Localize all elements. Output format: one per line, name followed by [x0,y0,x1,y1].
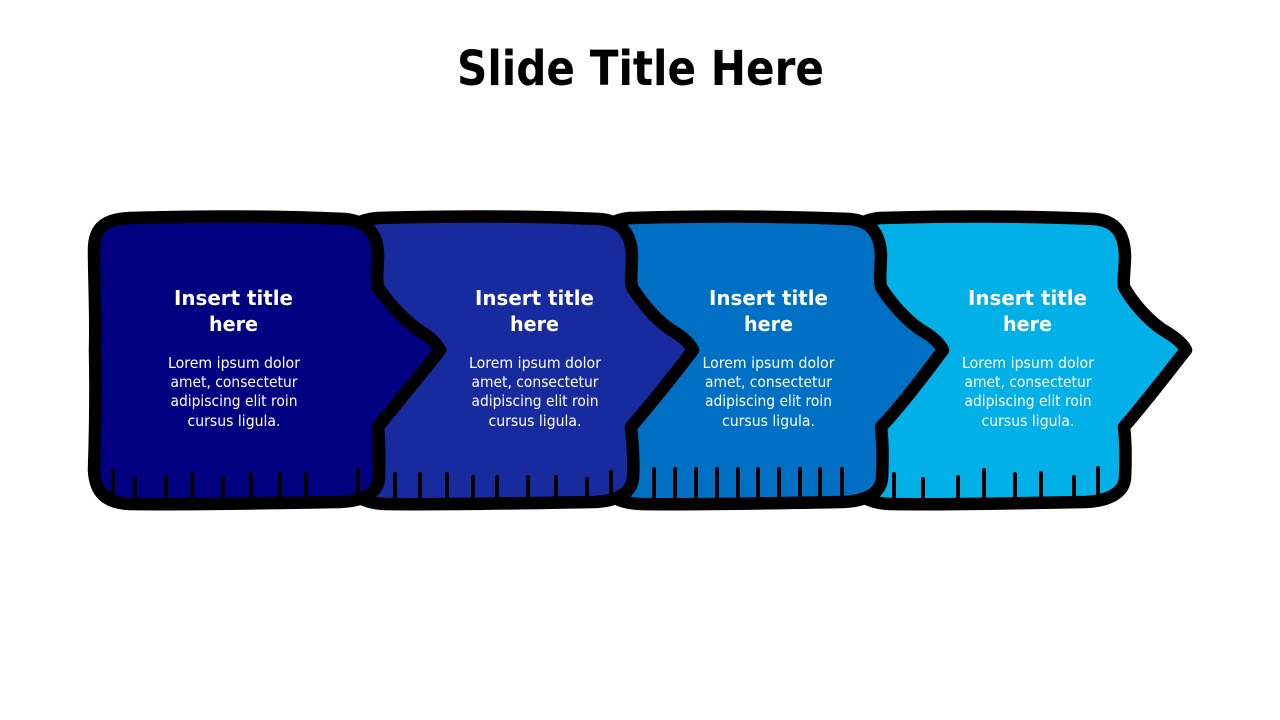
step 4 heading [968,286,1087,336]
step 4 heading: here [1003,312,1052,336]
step 1 fringe ticks [113,470,358,497]
step 4 body text: Lorem ipsum dolor [962,354,1095,372]
step 2 body text: cursus ligula. [488,412,582,430]
step 2 heading: here [510,312,559,336]
step 1 body text: cursus ligula. [188,412,280,430]
step 4 arrow shape [850,217,1186,504]
step 3 body text [702,354,835,430]
step 4 body text: amet, consectetur [964,373,1092,391]
step 2 body text: adipiscing elit roin [472,392,598,410]
step 2 body text [469,354,602,430]
step 4 body text [962,354,1095,430]
step 1 heading: Insert title [174,286,293,310]
step 3 fringe ticks [654,469,842,497]
title: Slide Title Here [457,41,824,97]
step 1 heading: here [209,312,258,336]
step 4 heading: Insert title [968,286,1087,310]
step 3 body text: Lorem ipsum dolor [702,354,835,372]
step 2 heading [475,286,594,336]
step 2 fringe ticks [395,472,611,497]
panel: step 2 arrow [345,217,693,504]
step 2 arrow shape [345,217,693,504]
step 3 heading: here [744,312,793,336]
panel: step 1 arrow [94,217,440,504]
step 1 body text: adipiscing elit roin [170,392,298,410]
panel: step 4 arrow [850,217,1186,504]
step 4 fringe ticks [894,468,1098,497]
step 1 arrow shape [94,217,440,504]
step 4 body text: cursus ligula. [982,412,1074,430]
step 3 arrow shape [600,217,943,504]
step 3 body text: cursus ligula. [722,412,815,430]
panel: step 3 arrow [600,217,943,504]
step 3 body text: amet, consectetur [705,373,833,391]
step 3 heading [709,286,828,336]
step 1 body text: amet, consectetur [170,373,298,391]
step 4 body text: adipiscing elit roin [964,392,1092,410]
step 1 body text: Lorem ipsum dolor [168,354,301,372]
step 1 heading [174,286,293,336]
step 2 heading: Insert title [475,286,594,310]
step 2 body text: Lorem ipsum dolor [469,354,602,372]
step 1 body text [168,354,301,430]
step 3 body text: adipiscing elit roin [705,392,832,410]
step 3 heading: Insert title [709,286,828,310]
step 2 body text: amet, consectetur [472,373,599,391]
